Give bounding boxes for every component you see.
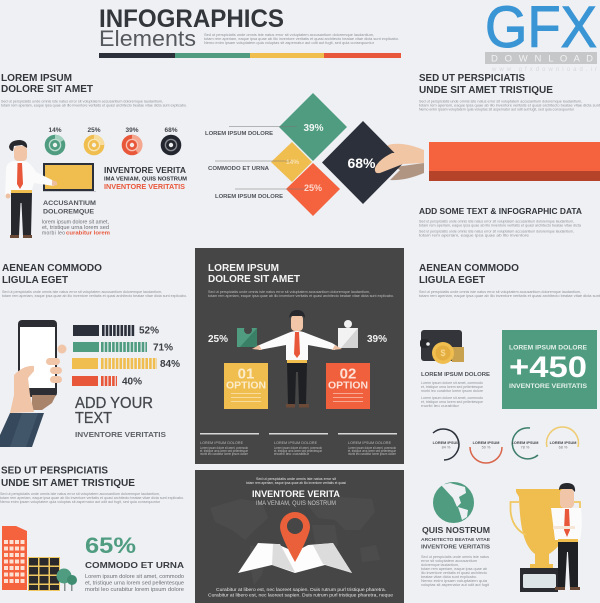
- footer columns: morbi leo curabitur lorem ipsum dolore: [200, 452, 248, 456]
- map heading: totam rem aperiam, eaque ipsa quae ab illo inventore veritatis et quasi: [246, 481, 346, 485]
- panel: sed ut heading bottom: [0, 464, 184, 504]
- panel: sed ut heading bottom: Sed ut perspiciatis unde omnis iste natus error sit voluptatem accusantium doloremque laudantium,: [0, 492, 160, 496]
- bar chart: 71%: [153, 342, 173, 354]
- percentages: [208, 334, 387, 345]
- footer columns: et, tristique urna lorem sed pellentesque: [348, 449, 396, 453]
- title: INFOGRAPHICS: [99, 5, 284, 33]
- panel: top left heading: LOREM IPSUM: [1, 72, 72, 84]
- callout: +450: INVENTORE VERITATIS: [509, 383, 588, 390]
- map footer text: Curabitur at libero est, nec laoreet sapien. Duis rutrum purl tristique pharetra.: [216, 587, 386, 592]
- diamond chart: [205, 93, 404, 216]
- panel: aenean heading left: LIGULA EGET: [2, 274, 69, 286]
- panel: top left heading: Sed ut perspiciatis unde omnis iste natus error sit voluptatem accusantium doloremque laudantium,: [1, 100, 163, 104]
- diamond chart: LOREM IPSUM DOLORE: [215, 194, 284, 200]
- text block: add your text: [75, 395, 166, 439]
- text block: quis nostrum: beatae vitae dicta sunt explicabo.: [421, 575, 477, 579]
- percentages: 25%: [208, 334, 228, 345]
- ring charts: LOREM IPSUM: [512, 441, 538, 445]
- diamond chart: 68%: [347, 155, 376, 171]
- text block: quis nostrum: INVENTORE VERITATIS: [421, 544, 490, 550]
- intro text: Nemo enim ipsam voluptatem quia voluptas sit aspernatur aut odit aut fugit, sed quia consequuntur: [204, 41, 375, 45]
- logo: GFX download: www.gfxdownload.ir: [491, 67, 597, 73]
- world map silhouette: [210, 497, 380, 585]
- illustration: trophy and businessman: [510, 483, 582, 592]
- footer columns: LOREM IPSUM DOLORE: [200, 441, 244, 445]
- panel: add some text: totam rem aperiam, eaque ipsa quae ab illo inventore veritatis et quasi architecto beatae vitae dicta: [419, 224, 581, 228]
- text block: quis nostrum: error sit voluptatem accusantium: [421, 559, 477, 563]
- icon: location pin: [280, 512, 310, 562]
- text block: quis nostrum: QUIS NOSTRUM: [422, 525, 490, 535]
- diamond chart: LOREM IPSUM DOLORE: [205, 131, 274, 137]
- panel: add some text: [419, 206, 582, 238]
- panel: add some text: Sed ut perspiciatis unde omnis iste natus error sit voluptatem accusantium doloremque laudantium,: [419, 220, 574, 224]
- panel: add some text: Sed ut perspiciatis unde omnis iste natus error sit voluptatem accusantium doloremque laudantium,: [419, 230, 574, 234]
- text block: quis nostrum: totam rem aperiam, eaque ipsa quae ab: [421, 567, 487, 571]
- footer columns: et, tristique urna lorem sed pellentesque: [200, 449, 248, 453]
- text block: wallet: LOREM IPSUM DOLORE: [421, 372, 490, 378]
- text block: quis nostrum: Nemo enim ipsam voluptatem quia: [421, 579, 487, 583]
- intro text: totam rem aperiam, eaque ipsa quae ab illo inventore veritatis et quasi architecto beatae vitae dicta sunt explicabo.: [204, 37, 399, 41]
- callout: inventore verita: INVENTORE VERITATIS: [104, 184, 185, 191]
- panel: aenean heading right: LIGULA EGET: [419, 274, 486, 286]
- text block: add your text: TEXT: [75, 410, 112, 427]
- text block: wallet: [421, 372, 490, 408]
- stat: 65%: 65%: [85, 533, 136, 558]
- text block: add your text: INVENTORE VERITATIS: [75, 432, 166, 439]
- panel: dark map: [195, 470, 404, 603]
- text block: accusantium: DOLOREMQUE: [43, 208, 94, 216]
- text block: add your text: ADD YOUR: [75, 395, 153, 412]
- ring charts: 68 %: [559, 446, 568, 450]
- map heading: INVENTORE VERITA: [252, 489, 340, 500]
- panel: add some text: totam rem aperiam, eaque ipsa quae ab illo inventore: [419, 234, 529, 238]
- panel: aenean heading right: totam rem aperiam, eaque ipsa quae ab illo inventore veritatis et quasi architecto beatae vitae dicta sunt: [419, 294, 600, 298]
- text block: wallet: et, tristique urna lorem sed pellentesque: [421, 400, 483, 404]
- ring charts: LOREM IPSUM: [433, 441, 459, 445]
- callout: +450: LOREM IPSUM DOLORE: [509, 344, 588, 352]
- footer columns: [200, 433, 397, 456]
- panel: sed ut heading right: UNDE SIT AMET TRISTIQUE: [419, 84, 553, 96]
- ring charts: LOREM IPSUM: [550, 441, 576, 445]
- callout: inventore verita: [104, 166, 187, 191]
- panel: add some text: ADD SOME TEXT & INFOGRAPHIC DATA: [419, 206, 582, 216]
- text block: accusantium: et, tristique urna lorem sed: [42, 225, 109, 231]
- stat: 65%: morbi leo curabitur lorem ipsum dolore: [85, 587, 184, 593]
- text block: wallet: et, tristique urna lorem sed pellentesque: [421, 385, 483, 389]
- intro text: Sed ut perspiciatis unde omnis iste natus error sit voluptatem accusantium doloremque laudantium,: [204, 33, 374, 37]
- map heading: Sed ut perspiciatis unde omnis iste natus error sit: [256, 477, 336, 481]
- panel: sed ut heading right: SED UT PERSPICIATIS: [419, 72, 525, 84]
- logo: GFX download: D O W N L O A D: [491, 54, 593, 64]
- callout: +450: +450: [509, 351, 587, 384]
- illustration: presenter with board: [5, 140, 96, 238]
- footer columns: et, tristique urna lorem sed pellentesque: [274, 449, 322, 453]
- text block: wallet: Lorem ipsum dolore sit amet, commodo: [421, 381, 483, 385]
- text block: wallet: morbi leo curabitur: [421, 404, 460, 408]
- panel: aenean heading left: Sed ut perspiciatis unde omnis iste natus error sit voluptatem accusantium doloremque laudantium,: [2, 290, 162, 294]
- illustration: man with puzzle pieces: [237, 310, 358, 408]
- option 01: 01: [238, 366, 254, 382]
- bar chart: 84%: [160, 359, 180, 370]
- panel: aenean heading left: AENEAN COMMODO: [2, 262, 102, 274]
- panel: aenean heading right: [419, 262, 600, 298]
- map footer text: [208, 587, 394, 598]
- callout: +450: [502, 330, 597, 409]
- stat: 65%: [85, 533, 184, 593]
- donut charts: [45, 127, 181, 155]
- text block: accusantium: [42, 200, 111, 236]
- donut charts: 25%: [87, 127, 101, 134]
- stat: 65%: COMMODO ET URNA: [85, 560, 184, 570]
- ring charts: 84 %: [442, 446, 451, 450]
- ring charts: 50 %: [482, 446, 491, 450]
- ring charts: 78 %: [521, 446, 530, 450]
- text block: accusantium: curabitur lorem: [66, 230, 111, 236]
- panel: dark people: [195, 248, 404, 464]
- footer columns: Lorem ipsum dolore sit amet, commodo: [200, 446, 248, 450]
- donut charts: 14%: [48, 127, 62, 134]
- icon: wallet and coins: $: [440, 348, 446, 358]
- footer columns: Lorem ipsum dolore sit amet, commodo: [274, 446, 322, 450]
- footer columns: Lorem ipsum dolore sit amet, commodo: [348, 446, 396, 450]
- panel: sed ut heading right: [419, 72, 600, 112]
- icon: globe: [433, 482, 474, 523]
- illustration: finger and sleeve: [375, 142, 600, 181]
- option 01: OPTION: [226, 380, 266, 392]
- text block: quis nostrum: illo inventore veritatis et quasi architecto: [421, 571, 487, 575]
- ring charts: [433, 427, 578, 463]
- footer columns: morbi leo curabitur: [274, 452, 310, 456]
- stat: 65%: Lorem ipsum dolore sit amet, commodo: [85, 574, 184, 580]
- donut charts: 68%: [164, 127, 178, 134]
- icon: wallet and coins: [420, 330, 464, 364]
- text block: quis nostrum: voluptas sit aspernatur aut odit aut fugit: [421, 583, 489, 587]
- panel: top left heading: totam rem aperiam, eaque ipsa quae ab illo inventore veritatis et quasi architecto beatae vitae dicta sunt explicabo.: [1, 104, 187, 108]
- donut charts: 39%: [125, 127, 139, 134]
- dark panel heading: Sed ut perspiciatis unde omnis iste natus error sit voluptatem accusantium doloremque laudantium,: [208, 290, 370, 294]
- panel: sed ut heading bottom: totam rem aperiam, eaque ipsa quae ab illo inventore veritatis et quasi architecto beatae vitae dicta sunt explicabo.: [0, 496, 184, 500]
- panel: top left heading: DOLORE SIT AMET: [1, 83, 94, 95]
- diamond chart: 14%: [286, 159, 299, 166]
- text block: accusantium: lorem ipsum dolore sit amet,: [42, 220, 109, 226]
- ring charts: LOREM IPSUM: [473, 441, 499, 445]
- illustration: hand behind dark diamond: [385, 144, 424, 180]
- panel: sed ut heading right: Sed ut perspiciatis unde omnis iste natus error sit voluptatem accusantium doloremque laudantium,: [419, 100, 582, 104]
- panel: sed ut heading bottom: Nemo enim ipsam voluptatem quia voluptas sit aspernatur aut odit aut fugit, sed quia consequuntur: [0, 500, 161, 504]
- diamond chart: 25%: [304, 183, 322, 193]
- text block: quis nostrum: doloremque laudantium,: [421, 563, 459, 567]
- option 02: OPTION: [328, 380, 368, 392]
- title: [99, 5, 284, 51]
- option 02: 02: [340, 366, 356, 382]
- dark panel heading: DOLORE SIT AMET: [208, 273, 301, 285]
- icon: folded map: [238, 543, 352, 573]
- diamond chart: 39%: [303, 123, 324, 134]
- panel: sed ut heading bottom: SED UT PERSPICIATIS: [1, 464, 108, 476]
- footer columns: LOREM IPSUM DOLORE: [348, 441, 392, 445]
- callout: inventore verita: INVENTORE VERITA: [104, 166, 186, 175]
- panel: sed ut heading right: Nemo enim ipsam voluptatem quia voluptas sit aspernatur aut odit aut fugit, sed quia consequuntur: [419, 108, 575, 112]
- title colour bar: [99, 53, 401, 58]
- text block: quis nostrum: [421, 525, 490, 587]
- stat: 65%: et, tristique urna lorem sed pellentesque: [85, 580, 184, 586]
- dark panel heading: LOREM IPSUM: [208, 262, 279, 274]
- intro text: [204, 33, 399, 45]
- illustration: phone in hand: [0, 320, 66, 447]
- text block: quis nostrum: Sed ut perspiciatis unde omnis iste natus: [421, 555, 489, 559]
- panel: top left heading: [1, 72, 187, 108]
- panel: aenean heading right: AENEAN COMMODO: [419, 262, 519, 274]
- map heading: [246, 477, 346, 507]
- panel: aenean heading left: totam rem aperiam, eaque ipsa quae ab illo inventore veritatis et quasi architecto beatae vitae dicta sunt explicabo.: [2, 294, 187, 298]
- text block: wallet: morbi leo curabitur lorem ipsum dolore: [421, 389, 483, 393]
- map heading: IMA VENIAM, QUIS NOSTRUM: [256, 501, 336, 507]
- callout: inventore verita: IMA VENIAM, QUIS NOSTRUM: [104, 176, 187, 182]
- text block: quis nostrum: ARCHITECTO BEATAE VITAE: [421, 537, 490, 542]
- panel: aenean heading right: Sed ut perspiciatis unde omnis iste natus error sit voluptatem accusantium doloremque laudantium,: [419, 290, 581, 294]
- title: Elements: [99, 26, 196, 51]
- map footer text: Curabitur at libero est, nec laoreet sapien. Duis rutrum purl tristique pharetra, neque: [208, 592, 394, 598]
- dark panel heading: [208, 262, 394, 298]
- option 01: [224, 363, 268, 409]
- option 02: [326, 363, 370, 409]
- bar chart: [72, 325, 180, 388]
- text block: wallet: Lorem ipsum dolore sit amet, commodo: [421, 396, 483, 400]
- percentages: 39%: [367, 334, 387, 345]
- footer columns: morbi leo curabitur lorem ipsum dolore: [348, 452, 396, 456]
- text block: accusantium: morbi leo: [42, 230, 65, 236]
- bar chart: 40%: [122, 376, 142, 388]
- footer columns: LOREM IPSUM DOLORE: [274, 441, 318, 445]
- panel: sed ut heading bottom: UNDE SIT AMET TRISTIQUE: [1, 477, 135, 489]
- panel: aenean heading left: [2, 262, 187, 298]
- bar chart: 52%: [139, 326, 159, 336]
- dark panel heading: totam rem aperiam, eaque ipsa quae ab illo inventore veritatis et quasi architecto beatae vitae dicta sunt explicabo.: [208, 294, 394, 298]
- diamond chart: COMMODO ET URNA: [208, 166, 269, 172]
- illustration: city buildings: [2, 526, 77, 591]
- text block: accusantium: ACCUSANTIUM: [43, 200, 96, 207]
- panel: sed ut heading right: totam rem aperiam, eaque ipsa quae ab illo inventore veritatis et quasi architecto beatae vitae dicta sunt: [419, 104, 600, 108]
